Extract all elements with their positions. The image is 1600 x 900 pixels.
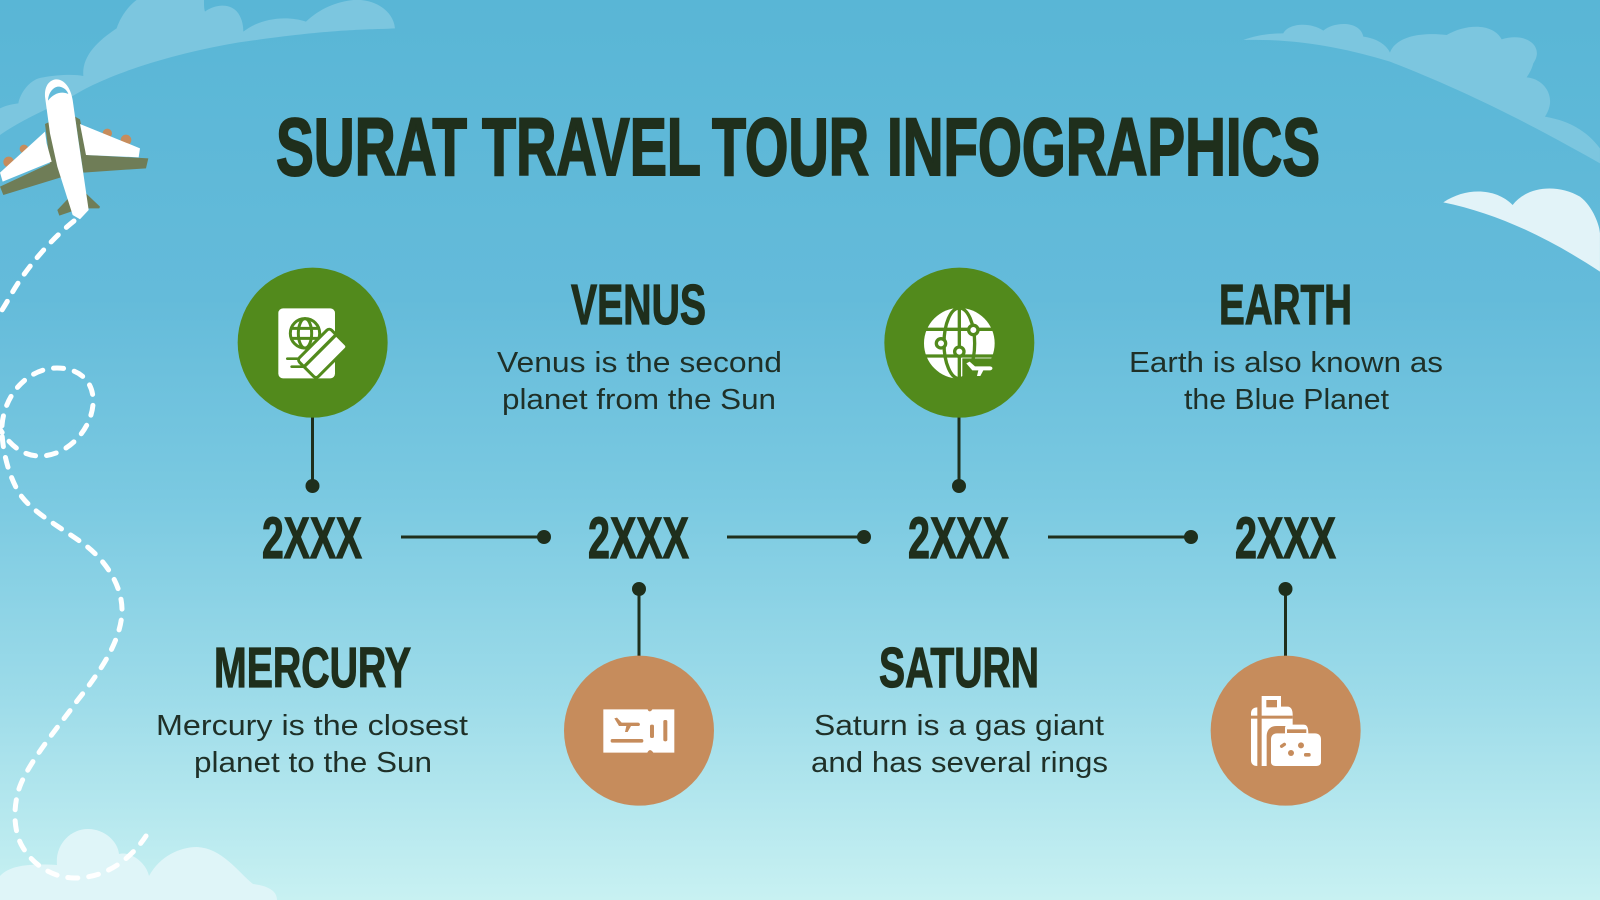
title: TRAVEL	[482, 102, 700, 193]
panel: earth	[1129, 273, 1443, 416]
description: and has several rings	[811, 747, 1108, 779]
cloud: bottom left	[0, 829, 277, 900]
title: INFOGRAPHICS	[887, 102, 1320, 193]
description: planet to the Sun	[194, 747, 432, 779]
description: planet from the Sun	[502, 384, 776, 416]
year 3: 2XXX	[908, 506, 1009, 571]
cloud: top right	[1243, 24, 1600, 163]
year 2: 2XXX	[588, 506, 689, 571]
icon: boarding ticket	[564, 656, 714, 806]
year labels	[262, 506, 1336, 571]
cloud: white right	[1443, 189, 1600, 272]
description: Venus is the second	[497, 347, 782, 379]
icon: airplane	[0, 79, 148, 219]
dashed flight path	[0, 221, 146, 878]
heading: MERCURY	[214, 636, 411, 700]
year 4: 2XXX	[1235, 506, 1336, 571]
wings	[0, 124, 140, 182]
cloud: top left	[0, 0, 395, 135]
year 1: 2XXX	[262, 506, 362, 571]
heading: EARTH	[1219, 273, 1352, 337]
title: TOUR	[712, 102, 869, 193]
description: Saturn is a gas giant	[814, 710, 1104, 742]
description: the Blue Planet	[1184, 384, 1389, 416]
icon: passport and card	[238, 268, 388, 418]
icon: luggage	[1211, 656, 1361, 806]
icon: globe and plane	[884, 268, 1034, 418]
description: Mercury is the closest	[156, 710, 468, 742]
description: Earth is also known as	[1129, 347, 1443, 379]
engines	[3, 129, 131, 167]
panel: mercury	[156, 636, 468, 779]
timeline connectors	[306, 415, 1292, 660]
wing undersides and tail	[0, 117, 148, 216]
fuselage	[45, 79, 89, 219]
heading: VENUS	[571, 273, 706, 337]
title: SURAT	[276, 102, 467, 193]
panel: venus	[497, 273, 782, 416]
windshield	[48, 87, 68, 101]
heading: SATURN	[879, 636, 1039, 700]
panel: saturn	[811, 636, 1108, 779]
